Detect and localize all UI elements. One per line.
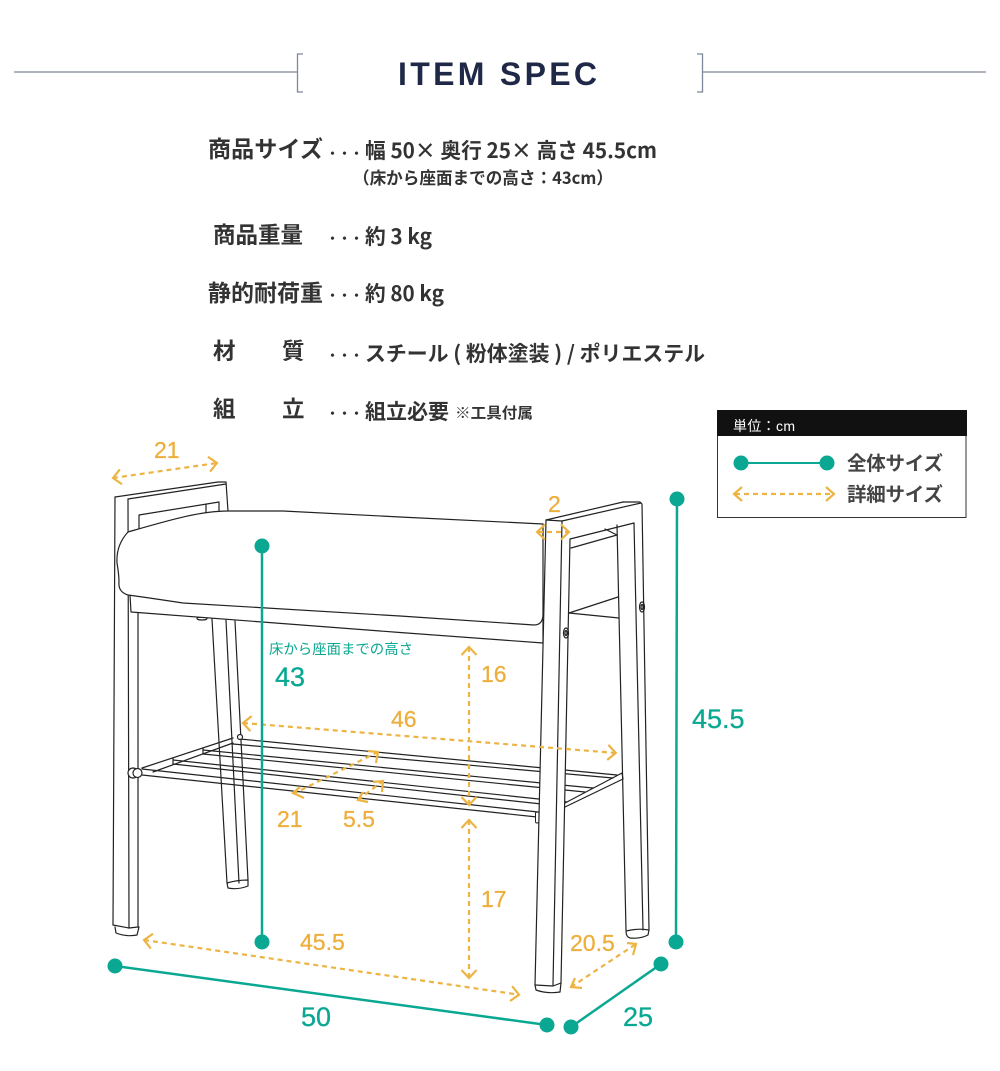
spec row: size label: 商品サイズ — [208, 130, 323, 164]
left front post — [113, 497, 139, 936]
spec row: material label: 材 — [213, 334, 236, 366]
line: depth 25 — [564, 956, 668, 1034]
spec row: material label second character: 質 — [282, 334, 305, 366]
spec row: weight dots: ・・・ — [326, 228, 363, 247]
spec row: load dots: ・・・ — [326, 285, 363, 304]
arrow: armrest depth 21 — [112, 456, 218, 485]
spec row: weight label: 商品重量 — [213, 218, 303, 250]
spec row: assembly label: 組 — [213, 392, 236, 424]
arrow: post width 2 — [537, 524, 569, 540]
spec row: assembly label second character: 立 — [282, 392, 305, 424]
seat base board — [130, 595, 543, 643]
spec row: size dots: ・・・ — [326, 143, 363, 162]
arrow: seat to shelf 16 — [462, 647, 476, 805]
line: height 45.5 — [668, 492, 684, 950]
spec row: load label: 静的耐荷重 — [208, 274, 323, 308]
spec list — [208, 130, 705, 426]
legend header bar — [717, 410, 967, 436]
spec row: material dots: ・・・ — [326, 345, 363, 364]
label: 5.5: 5.5 — [343, 806, 375, 832]
header ornament: left rule and bracket — [14, 54, 303, 92]
arrow: shelf depth 21 — [293, 751, 378, 798]
arrow: slat pitch 5.5 — [358, 781, 383, 802]
label: 43: 43 — [275, 662, 305, 692]
back right leg and arm frame — [569, 502, 649, 938]
legend unit text: 単位：cm — [733, 418, 795, 434]
label: 20.5: 20.5 — [570, 930, 615, 956]
spec row: seat height note: （床から座面までの高さ：43cm） — [353, 164, 613, 189]
label: 50: 50 — [301, 1002, 331, 1032]
arrow: shelf to floor 17 — [462, 820, 476, 978]
spec row: assembly dots: ・・・ — [326, 403, 363, 422]
label: 45.5 inner width: 45.5 — [300, 929, 345, 955]
label: 17: 17 — [481, 886, 507, 912]
label: 2 post: 2 — [548, 491, 561, 517]
back left leg — [197, 617, 248, 889]
dimension arrows: detail sizes — [112, 456, 636, 1002]
label: 25: 25 — [623, 1002, 653, 1032]
arrow: shelf width 46 — [242, 716, 616, 760]
shelf rack — [128, 734, 623, 823]
arrow: inner width 45.5 — [143, 933, 520, 1002]
title: ITEM SPEC — [398, 56, 597, 92]
bench line drawing — [113, 482, 649, 993]
label: 45.5 height: 45.5 — [692, 704, 745, 734]
spec row: size value: 幅 50× 奥行 25× 高さ 45.5cm — [365, 135, 657, 165]
label: 21 shelf depth: 21 — [277, 806, 303, 832]
spec row: material value: スチール ( 粉体塗装 ) / ポリエステル — [365, 338, 705, 368]
spec row: assembly value: 組立必要 — [365, 396, 449, 426]
legend overall size label: 全体サイズ — [847, 452, 943, 475]
left arm frame — [115, 482, 228, 529]
label: 21 armrest: 21 — [154, 437, 180, 463]
legend detail size label: 詳細サイズ — [847, 483, 943, 506]
arrow: leg depth 20.5 — [571, 943, 636, 988]
seat cushion — [117, 511, 543, 625]
label: seat height caption: 床から座面までの高さ — [269, 641, 413, 658]
legend panel — [717, 410, 967, 518]
right front post — [535, 502, 641, 993]
spec row: tools note: ※工具付属 — [455, 402, 533, 423]
line: seat height 43 — [254, 538, 270, 950]
label: 46 shelf width: 46 — [391, 706, 417, 732]
header ornament: right rule and bracket — [697, 54, 986, 92]
spec row: load value: 約 80 kg — [365, 278, 444, 308]
line: width 50 — [108, 958, 554, 1032]
label: 16: 16 — [481, 661, 507, 687]
dimension lines: overall sizes — [108, 492, 684, 1034]
legend overall size line — [734, 456, 834, 470]
legend frame — [718, 410, 966, 518]
legend detail size arrow — [734, 487, 834, 501]
spec row: weight value: 約 3 kg — [365, 221, 432, 251]
